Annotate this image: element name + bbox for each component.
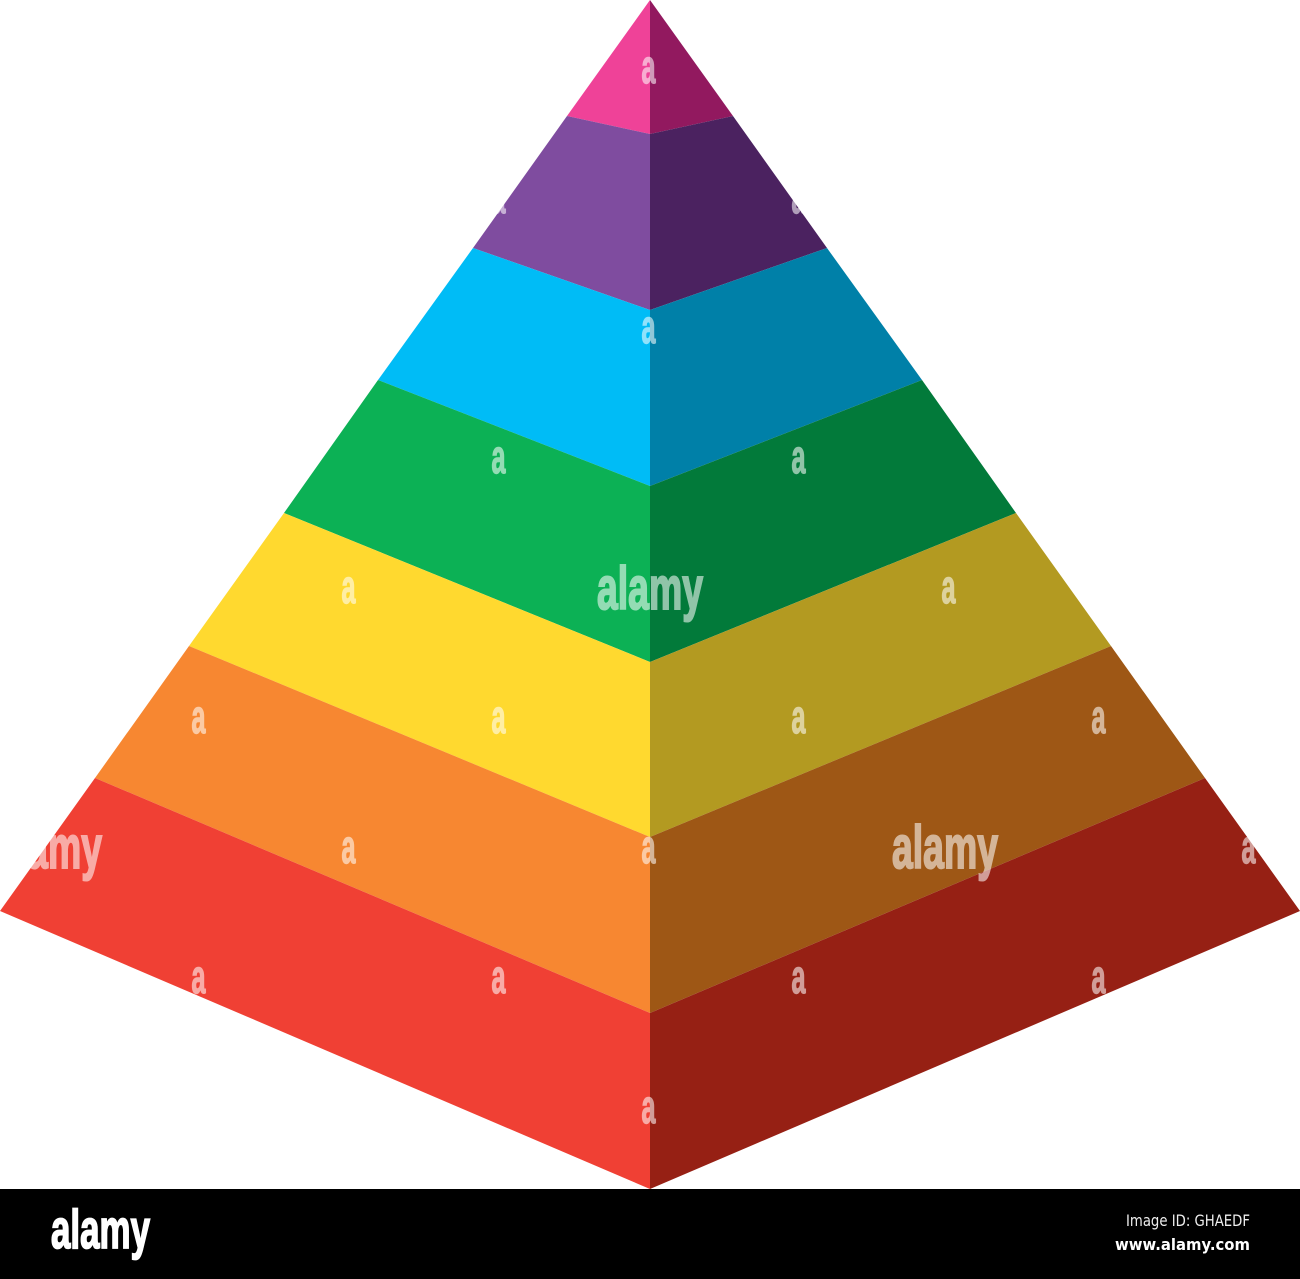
watermark: small marks: a bbox=[1092, 690, 1106, 743]
watermark: small marks: a bbox=[1242, 820, 1256, 873]
watermark: small marks: a bbox=[192, 690, 206, 743]
watermark: small marks: a bbox=[642, 820, 656, 873]
watermark: small marks: a bbox=[192, 950, 206, 1003]
watermark: small marks: a bbox=[492, 950, 506, 1003]
watermark: small marks: a bbox=[1092, 950, 1106, 1003]
image id: Image ID: GHAEDF bbox=[1126, 1211, 1250, 1230]
watermark: small marks: a bbox=[792, 690, 806, 743]
watermark: small marks: a bbox=[492, 170, 506, 223]
layer 1: magenta top bbox=[567, 0, 733, 134]
layer 2: purple bbox=[473, 116, 827, 310]
watermark: small marks: a bbox=[642, 1080, 656, 1133]
watermark: small marks: a bbox=[342, 560, 356, 613]
watermark: center alamy: alamy bbox=[597, 555, 703, 622]
watermark: small marks: a bbox=[492, 690, 506, 743]
watermark: small marks: a bbox=[942, 560, 956, 613]
footer bar bbox=[0, 1189, 1300, 1279]
watermark: small marks: a bbox=[492, 430, 506, 483]
watermark: small marks: a bbox=[642, 300, 656, 353]
layer 4: green bbox=[284, 380, 1016, 662]
watermark: small marks: a bbox=[792, 170, 806, 223]
website: www.alamy.com bbox=[1115, 1235, 1250, 1254]
layer 3: blue bbox=[378, 248, 922, 486]
watermark: left alamy: alamy bbox=[0, 814, 102, 881]
watermark: small marks: a bbox=[642, 40, 656, 93]
watermark: small marks: a bbox=[342, 820, 356, 873]
layer 5: yellow bbox=[189, 513, 1111, 837]
layer 6: orange bbox=[95, 646, 1205, 1013]
watermark: small marks: a bbox=[792, 950, 806, 1003]
watermark: small marks bbox=[192, 40, 1256, 1133]
watermark: small marks: a bbox=[792, 430, 806, 483]
watermark: right alamy: alamy bbox=[892, 814, 998, 881]
footer logo: alamy bbox=[51, 1198, 150, 1260]
layer 7: red bbox=[0, 778, 1300, 1189]
